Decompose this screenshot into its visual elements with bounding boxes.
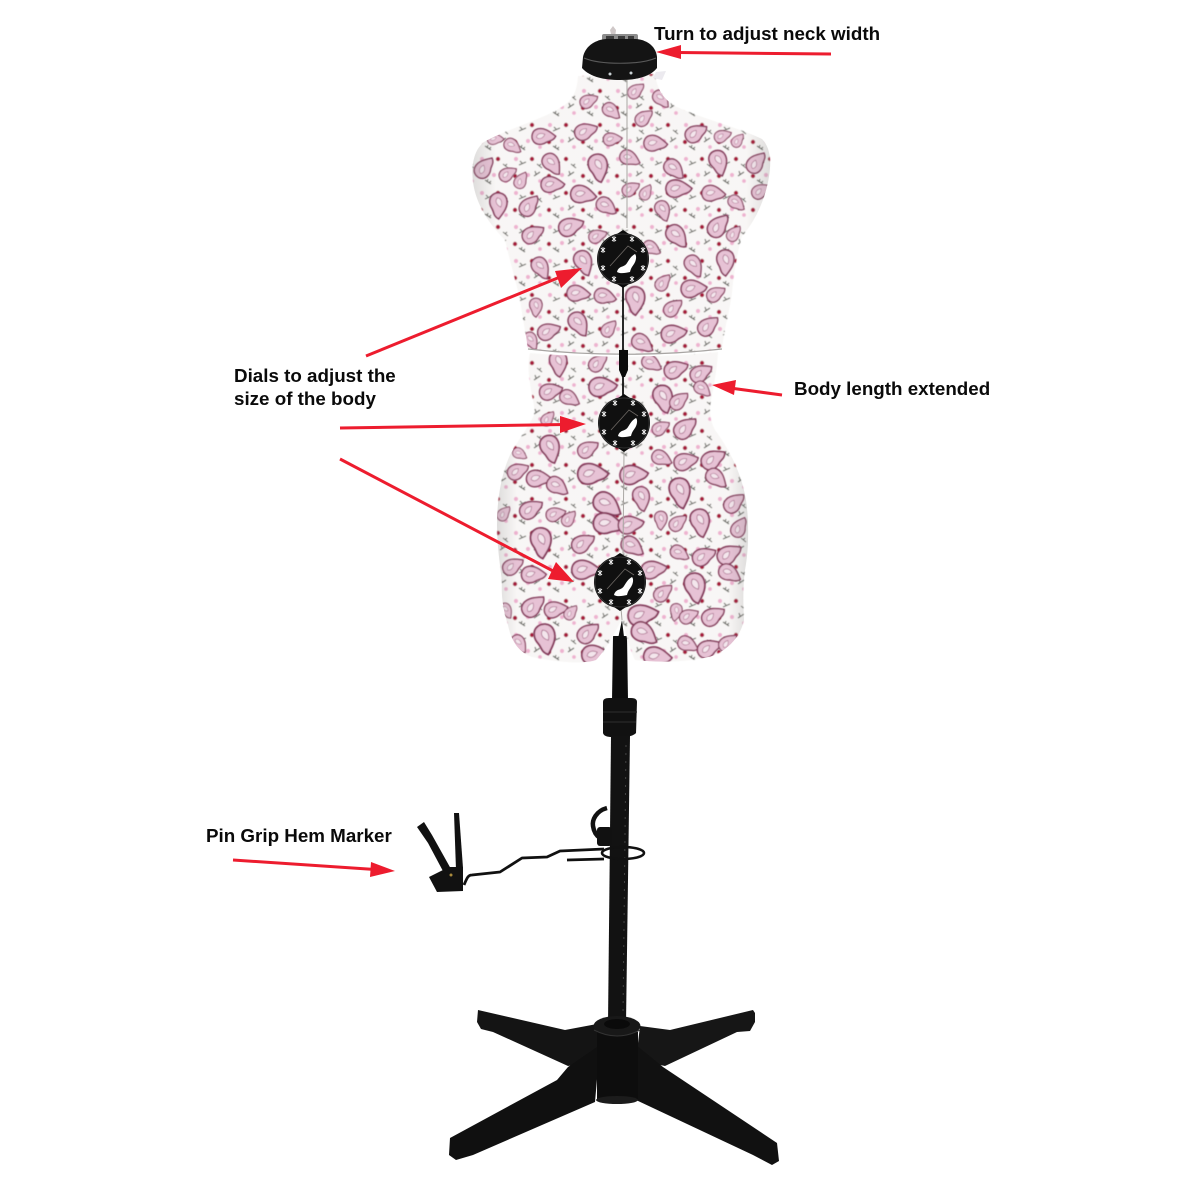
paisley print on upper torso bbox=[472, 79, 772, 353]
upper torso bbox=[472, 74, 772, 354]
arrow: neck width bbox=[656, 45, 831, 59]
label: dials: size of the body bbox=[234, 388, 376, 409]
lower torso bbox=[495, 348, 748, 668]
label: neck width: Turn to adjust neck width bbox=[654, 23, 880, 44]
stand pole bbox=[603, 636, 637, 1024]
dial: bust bbox=[597, 230, 649, 288]
pole top below slit bbox=[613, 620, 627, 680]
arrow: bust dial bbox=[366, 268, 582, 356]
neck cap bbox=[582, 26, 666, 80]
dial: hip bbox=[594, 553, 646, 611]
center lacing and clasp bbox=[619, 285, 628, 398]
hem marker on pole bbox=[417, 808, 644, 892]
dial: waist bbox=[598, 394, 650, 452]
label: body length: Body length extended bbox=[794, 378, 990, 399]
label: dials: Dials to adjust the bbox=[234, 365, 396, 386]
label: hem marker: Pin Grip Hem Marker bbox=[206, 825, 392, 846]
stand base bbox=[449, 1010, 779, 1165]
paisley print on lower torso bbox=[495, 348, 747, 668]
arrow: hip dial bbox=[340, 459, 574, 582]
arrow: waist dial bbox=[340, 416, 586, 433]
arrow: hem marker bbox=[233, 860, 395, 877]
arrow: body length bbox=[712, 380, 782, 395]
